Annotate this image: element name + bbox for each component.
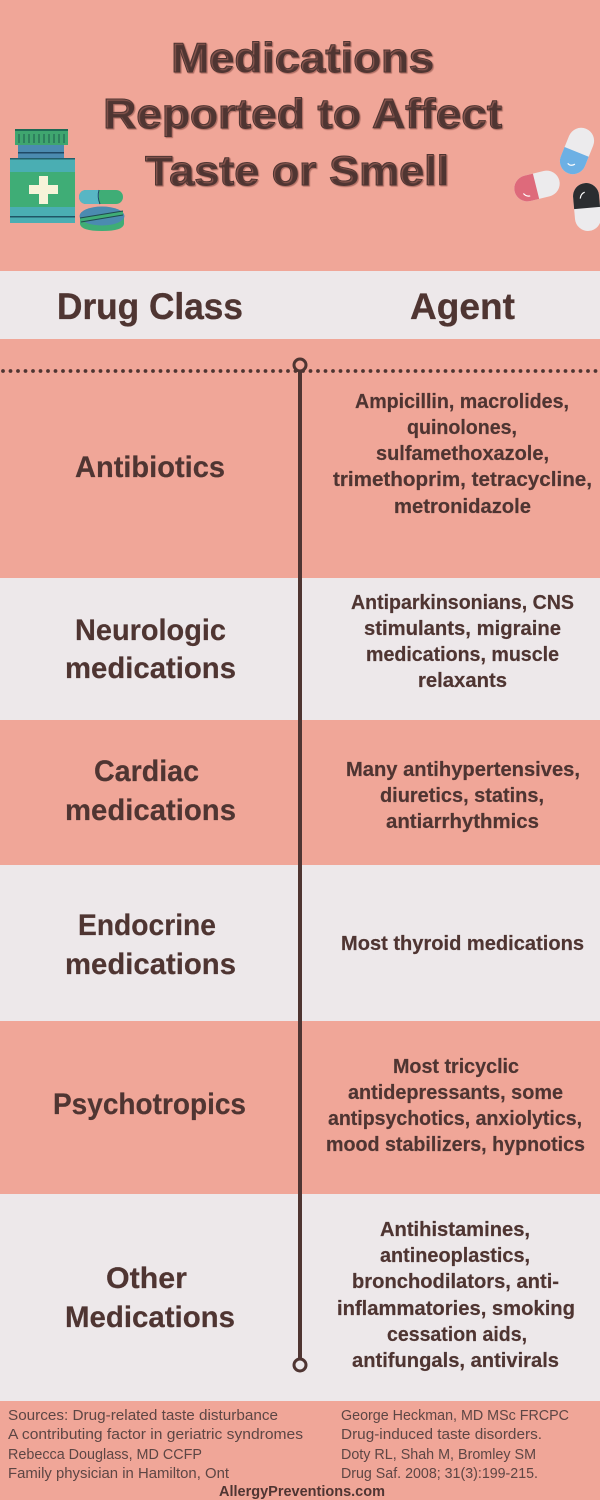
agents: other medications: inflammatories, smoking bbox=[337, 1297, 575, 1320]
panel: endocrine row bbox=[0, 865, 600, 1021]
drug class: endocrine: medications bbox=[65, 948, 236, 981]
agents: psychotropics: antidepressants, some bbox=[348, 1081, 563, 1104]
agents: psychotropics: antipsychotics, anxiolytics, bbox=[328, 1107, 582, 1130]
agents: neurologic: relaxants bbox=[418, 669, 507, 692]
agents: antibiotics: trimethoprim, tetracycline, bbox=[333, 468, 592, 491]
agents: cardiac bbox=[346, 758, 580, 833]
panel: sources footer bbox=[0, 1401, 600, 1500]
timeline bbox=[294, 359, 306, 1371]
drug class: cardiac: Cardiac bbox=[94, 755, 199, 788]
panel: neurologic row bbox=[0, 578, 600, 720]
drug class: other medications: Other bbox=[106, 1262, 187, 1295]
drug class: neurologic bbox=[65, 614, 236, 685]
agents: psychotropics: mood stabilizers, hypnotics bbox=[326, 1133, 585, 1156]
title: Reported to Affect bbox=[103, 90, 502, 137]
heading: drug class: Drug Class bbox=[57, 286, 243, 327]
title bbox=[103, 34, 502, 194]
drug class: antibiotics: Antibiotics bbox=[75, 451, 225, 484]
agents: psychotropics: Most tricyclic bbox=[393, 1055, 519, 1078]
agents: other medications: antineoplastics, bbox=[380, 1244, 530, 1267]
agents: neurologic: stimulants, migraine bbox=[364, 617, 561, 640]
sources: left column: Sources: Drug-related taste disturbance bbox=[8, 1408, 278, 1424]
agents: other medications: antifungals, antivirals bbox=[352, 1349, 559, 1372]
icon: round tablet bbox=[80, 206, 124, 231]
drug class: other medications: Medications bbox=[65, 1301, 235, 1334]
heading: agent: Agent bbox=[410, 286, 515, 327]
drug class: neurologic: Neurologic bbox=[75, 614, 226, 647]
icon: bottle cross bbox=[29, 176, 58, 204]
agents: antibiotics: metronidazole bbox=[394, 495, 531, 518]
sources: right column: Drug-induced taste disorders. bbox=[341, 1427, 542, 1443]
drug class: psychotropics: Psychotropics bbox=[53, 1088, 246, 1121]
icon: red capsule bbox=[512, 168, 562, 204]
icon: blue capsule bbox=[556, 124, 598, 178]
sources: right column bbox=[341, 1408, 569, 1482]
panel: antibiotics row bbox=[0, 339, 600, 578]
panel: psychotropics row bbox=[0, 1021, 600, 1194]
dotted divider bbox=[3, 369, 600, 373]
drug class: cardiac: medications bbox=[65, 794, 236, 827]
sources: left column: A contributing factor in geriatric syndromes bbox=[8, 1427, 303, 1443]
icon: teal and green pill bbox=[79, 190, 123, 204]
agents: cardiac: Many antihypertensives, bbox=[346, 758, 580, 781]
drug class: endocrine bbox=[65, 909, 236, 981]
icon: medicine bottle bbox=[10, 129, 75, 223]
agents: neurologic: Antiparkinsonians, CNS bbox=[351, 591, 574, 614]
panel: column headers bbox=[0, 271, 600, 339]
title: Taste or Smell bbox=[145, 147, 449, 194]
agents: antibiotics: sulfamethoxazole, bbox=[376, 442, 549, 465]
agents: other medications: bronchodilators, anti- bbox=[352, 1270, 559, 1293]
drug class: other medications bbox=[65, 1262, 235, 1334]
agents: antibiotics: Ampicillin, macrolides, bbox=[355, 390, 569, 413]
agents: other medications bbox=[337, 1218, 575, 1372]
panel: other medications row bbox=[0, 1194, 600, 1401]
sources: left column: Rebecca Douglass, MD CCFP bbox=[8, 1447, 202, 1463]
agents: antibiotics: quinolones, bbox=[407, 416, 517, 439]
sources: left column bbox=[8, 1408, 303, 1482]
website credit: AllergyPreventions.com bbox=[219, 1484, 385, 1500]
panel: cardiac row bbox=[0, 720, 600, 865]
agents: endocrine: Most thyroid medications bbox=[341, 932, 584, 955]
sources: right column: Drug Saf. 2008; 31(3):199-215. bbox=[341, 1466, 538, 1482]
sources: right column: Doty RL, Shah M, Bromley SM bbox=[341, 1447, 536, 1463]
icon: black capsule bbox=[572, 182, 600, 232]
agents: neurologic bbox=[351, 591, 574, 692]
agents: other medications: Antihistamines, bbox=[380, 1218, 530, 1241]
agents: neurologic: medications, muscle bbox=[366, 643, 559, 666]
sources: left column: Family physician in Hamilton, Ont bbox=[8, 1466, 229, 1482]
drug class: neurologic: medications bbox=[65, 652, 236, 685]
agents: cardiac: antiarrhythmics bbox=[386, 810, 539, 833]
agents: other medications: cessation aids, bbox=[387, 1323, 527, 1346]
title: Medications bbox=[171, 34, 434, 81]
agents: antibiotics bbox=[333, 390, 592, 518]
drug class: cardiac bbox=[65, 755, 236, 827]
panel: header background bbox=[0, 0, 600, 271]
sources: right column: George Heckman, MD MSc FRCPC bbox=[341, 1408, 569, 1424]
agents: cardiac: diuretics, statins, bbox=[380, 784, 544, 807]
agents: psychotropics bbox=[326, 1055, 585, 1156]
drug class: endocrine: Endocrine bbox=[78, 909, 216, 942]
